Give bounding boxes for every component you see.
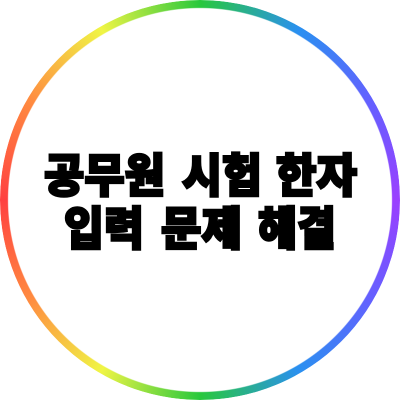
title line 1 [44, 150, 357, 202]
title line 1: 시험 [182, 150, 262, 202]
title line 1: 한자 [276, 150, 357, 202]
title line 2: 문제 [161, 203, 242, 255]
title line 2: 해결 [258, 203, 336, 255]
title line 2: 입력 [64, 203, 144, 255]
title line 2 [64, 203, 336, 255]
title line 1: 공무원 [44, 150, 165, 202]
